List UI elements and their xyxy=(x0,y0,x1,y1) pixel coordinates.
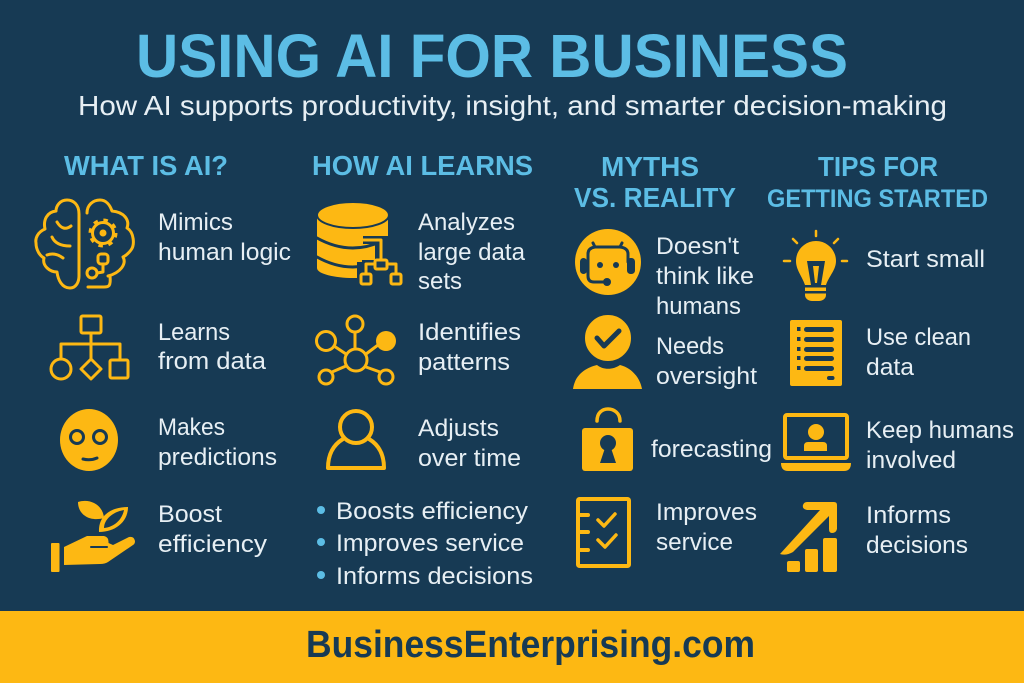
bullet list: Boosts efficiency xyxy=(336,498,528,525)
text: doesn't think like humans: Doesn't xyxy=(656,233,739,260)
heading: tips for getting started: TIPS FOR xyxy=(818,151,938,182)
icon: light bulb xyxy=(784,231,847,301)
text: makes predictions xyxy=(158,414,277,471)
footer band xyxy=(0,611,1024,683)
text: use clean data: Use clean xyxy=(866,324,971,351)
text: analyzes large data sets xyxy=(418,209,526,295)
text: learns from data: Learns xyxy=(158,319,230,346)
icon: growth arrow and bars xyxy=(780,502,837,572)
text: informs decisions xyxy=(866,502,968,559)
text: keep humans involved: involved xyxy=(866,447,956,474)
heading: what is AI: WHAT IS AI? xyxy=(64,150,228,181)
text: adjusts over time: Adjusts xyxy=(418,415,499,442)
icon: face xyxy=(60,409,118,471)
text: mimics human logic xyxy=(158,209,291,266)
text: needs oversight xyxy=(656,333,757,390)
panel: myths vs reality xyxy=(573,151,772,566)
bullet list: Improves service xyxy=(336,530,524,557)
panel: what is AI xyxy=(36,150,291,572)
text: doesn't think like humans: humans xyxy=(656,293,741,320)
text: mimics human logic: human logic xyxy=(158,239,291,266)
icon: network xyxy=(316,316,396,384)
panel: how AI learns xyxy=(312,150,533,590)
icon: flow tree xyxy=(51,316,128,379)
text: boost efficiency: Boost xyxy=(158,501,222,528)
text: improves service: service xyxy=(656,529,733,556)
heading: tips for getting started: GETTING STARTED xyxy=(767,185,988,213)
icon: document xyxy=(790,320,842,386)
text: identifies patterns xyxy=(418,319,521,376)
heading: myths vs reality xyxy=(574,151,736,213)
icon: laptop with person xyxy=(781,415,851,471)
text: learns from data xyxy=(158,319,267,375)
text: makes predictions: predictions xyxy=(158,444,277,471)
text: identifies patterns: patterns xyxy=(418,349,510,376)
icon: hand with plant xyxy=(51,501,135,572)
icon: robot headset xyxy=(575,229,641,295)
bullet list: Informs decisions xyxy=(336,563,533,590)
heading: myths vs reality: MYTHS xyxy=(601,151,699,182)
panel: tips for getting started xyxy=(767,151,1014,572)
text: improves service: Improves xyxy=(656,499,757,526)
title: USING AI FOR BUSINESS xyxy=(136,22,848,90)
text: boost efficiency xyxy=(158,501,267,558)
text: analyzes large data sets: large data xyxy=(418,239,526,266)
icon: brain xyxy=(36,200,133,288)
text: boost efficiency: efficiency xyxy=(158,531,267,558)
text: use clean data: data xyxy=(866,354,915,381)
text: needs oversight: oversight xyxy=(656,363,757,390)
text: informs decisions: Informs xyxy=(866,502,951,529)
text: learns from data: from data xyxy=(158,348,267,375)
icon: database network xyxy=(317,202,401,284)
text: informs decisions: decisions xyxy=(866,532,968,559)
text: analyzes large data sets: sets xyxy=(418,268,462,295)
heading: myths vs reality: VS. REALITY xyxy=(574,182,736,213)
text: mimics human logic: Mimics xyxy=(158,209,233,236)
text: forecasting: forecasting xyxy=(651,436,772,463)
text: doesn't think like humans xyxy=(656,233,754,320)
icon: checklist xyxy=(578,499,629,566)
icon: padlock xyxy=(582,409,633,471)
text: needs oversight: Needs xyxy=(656,333,724,360)
text: improves service xyxy=(656,499,757,556)
text: start small: Start small xyxy=(866,246,985,273)
text: doesn't think like humans: think like xyxy=(656,263,754,290)
text: makes predictions: Makes xyxy=(158,414,225,441)
text: keep humans involved: Keep humans xyxy=(866,417,1014,444)
heading: tips for getting started xyxy=(767,151,988,213)
text: keep humans involved xyxy=(866,417,1014,474)
icon: person outline xyxy=(328,411,384,468)
text: adjusts over time: over time xyxy=(418,445,521,472)
bullet list xyxy=(317,498,533,590)
text: adjusts over time xyxy=(418,415,521,472)
subtitle: How AI supports productivity, insight, and smarter decision-making xyxy=(78,90,947,121)
text: analyzes large data sets: Analyzes xyxy=(418,209,515,236)
heading: how AI learns: HOW AI LEARNS xyxy=(312,150,533,181)
footer text: BusinessEnterprising.com xyxy=(306,624,755,666)
text: use clean data xyxy=(866,324,971,381)
icon: person with check xyxy=(573,314,642,389)
text: identifies patterns: Identifies xyxy=(418,319,521,346)
